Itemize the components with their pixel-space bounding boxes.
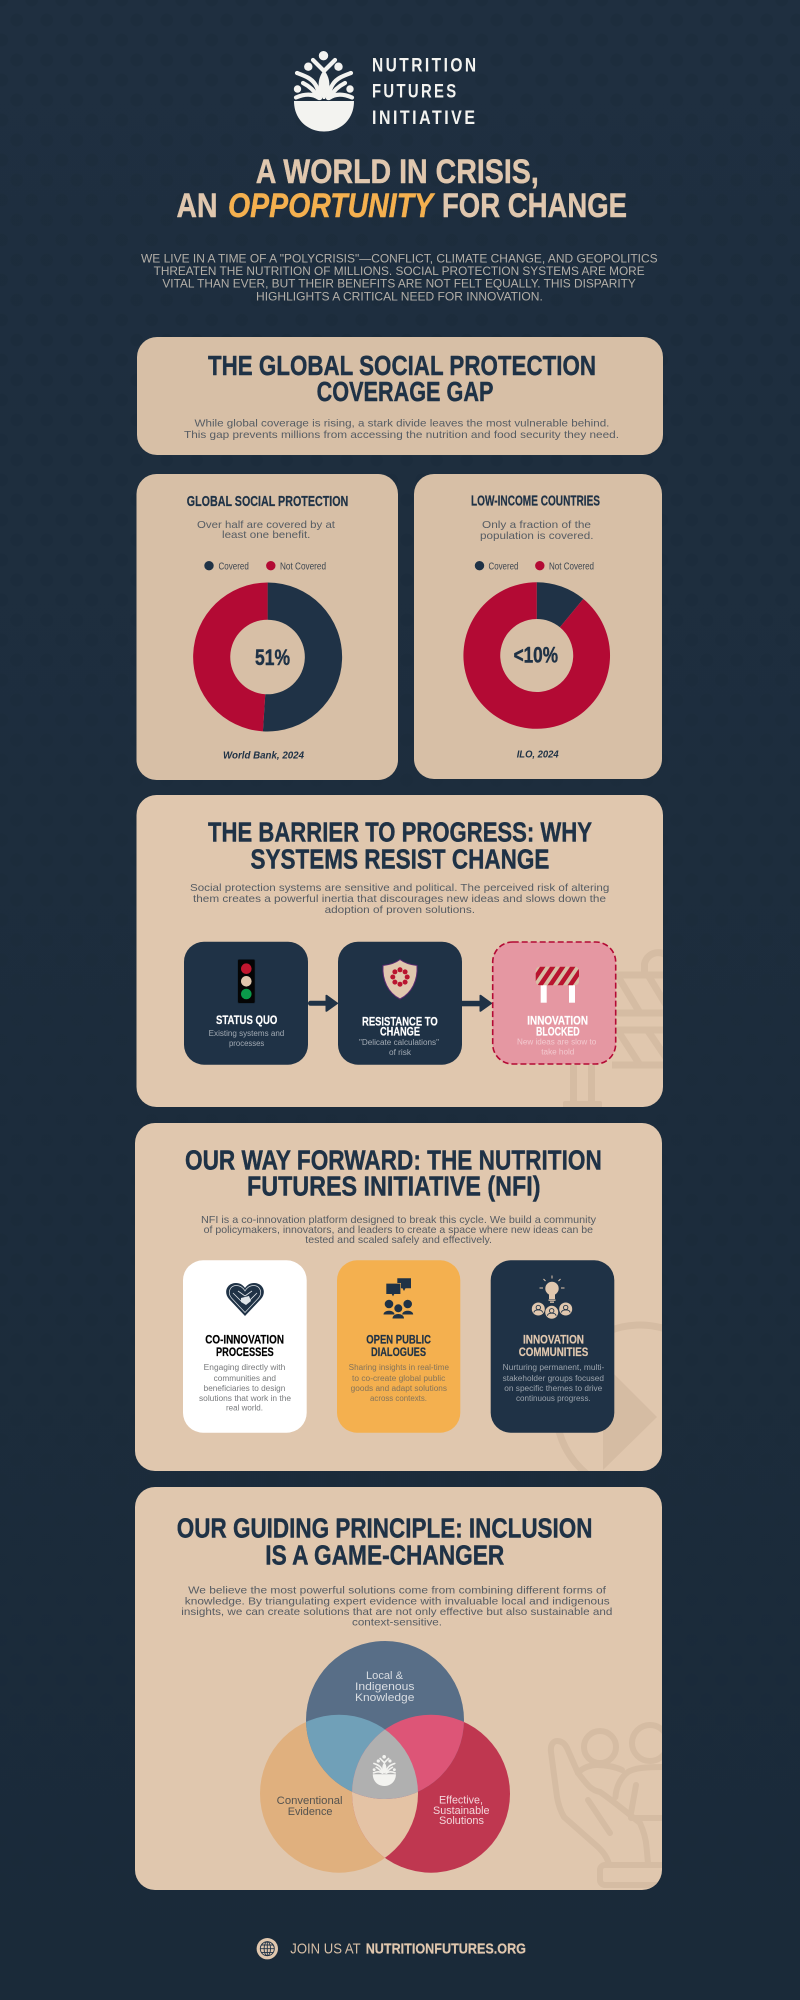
- step: innovation blocked: INNOVATION: [527, 1013, 588, 1027]
- text: guiding principle description: context-sensitive.: [352, 1617, 442, 1629]
- donut chart: 51 percent covered: [193, 582, 342, 732]
- heading: way forward: FUTURES INITIATIVE (NFI): [247, 1170, 540, 1201]
- step: innovation blocked: take hold: [541, 1048, 574, 1057]
- legend: Not Covered: [549, 561, 594, 572]
- legend: Not Covered: [280, 561, 326, 572]
- card: co-innovation processes: PROCESSES: [216, 1345, 274, 1359]
- intro paragraph: THREATEN THE NUTRITION OF MILLIONS. SOCIAL PROTECTION SYSTEMS ARE MORE: [154, 264, 645, 278]
- icon: handshake heart: [226, 1283, 264, 1316]
- venn label: local and indigenous knowledge: Local &: [366, 1670, 404, 1682]
- step: innovation blocked: [493, 942, 616, 1064]
- panel: our way forward: [135, 1123, 662, 1471]
- card: co-innovation processes: beneficiaries to design: [204, 1384, 285, 1393]
- heading: low-income countries: LOW-INCOME COUNTRIES: [471, 493, 600, 509]
- text: low-income description: [480, 519, 594, 542]
- text: global description: [197, 519, 335, 541]
- text: NFI description: tested and scaled safely and effectively.: [305, 1234, 492, 1246]
- text: barrier description: them creates a powerful inertia that discourages new ideas and slows down the: [193, 893, 606, 905]
- card: innovation communities: Nurturing permanent, multi-: [503, 1363, 605, 1372]
- icon: logo mark: [294, 51, 354, 132]
- legend: Covered: [488, 561, 518, 572]
- text: NFI description: NFI is a co-innovation platform designed to break this cycle. We build a community: [201, 1214, 597, 1226]
- panel: global social protection chart: [136, 474, 398, 780]
- step: resistance to change: RESISTANCE TO: [362, 1015, 438, 1029]
- text: coverage gap description: [184, 418, 619, 441]
- text: low-income description: population is covered.: [480, 530, 594, 542]
- heading: coverage gap: COVERAGE GAP: [317, 376, 493, 407]
- step: status quo: Existing systems and: [209, 1029, 284, 1038]
- step: resistance to change: [338, 942, 462, 1065]
- card: co-innovation processes: Engaging directly with: [204, 1363, 285, 1372]
- card: open public dialogues: OPEN PUBLIC: [366, 1333, 431, 1347]
- venn label: conventional evidence: Evidence: [288, 1806, 332, 1818]
- icon: watermark play circle: [556, 1322, 662, 1471]
- step: status quo: [184, 942, 308, 1065]
- icon: shield: [383, 960, 417, 999]
- title: FOR CHANGE: [442, 187, 627, 225]
- icon: road barrier: [536, 966, 579, 1003]
- legend: [475, 561, 594, 572]
- venn diagram: [260, 1641, 510, 1873]
- text: barrier description: Social protection systems are sensitive and political. The perceived risk of altering: [190, 882, 609, 894]
- heading: coverage gap: [208, 350, 596, 407]
- step: innovation blocked: New ideas are slow to: [517, 1038, 597, 1047]
- step: resistance to change: CHANGE: [380, 1025, 420, 1039]
- text: guiding principle description: insights, we can create solutions that are not only effective but also sustainable and: [181, 1606, 613, 1618]
- panel: coverage gap intro: [137, 337, 663, 455]
- heading: way forward: OUR WAY FORWARD: THE NUTRITION: [185, 1144, 602, 1175]
- card: open public dialogues: Sharing insights in real-time: [349, 1363, 450, 1372]
- icon: globe: [257, 1938, 278, 1959]
- logo wordmark: FUTURES: [372, 82, 458, 102]
- heading: way forward: [185, 1144, 602, 1201]
- header logo: [294, 51, 478, 132]
- intro paragraph: HIGHLIGHTS A CRITICAL NEED FOR INNOVATION.: [256, 290, 543, 304]
- card: co-innovation processes: real world.: [226, 1404, 263, 1413]
- panel: barrier to progress: [136, 795, 672, 1109]
- card: open public dialogues: to co-create global public: [352, 1374, 445, 1383]
- heading: barrier: THE BARRIER TO PROGRESS: WHY: [208, 817, 592, 848]
- heading: coverage gap: THE GLOBAL SOCIAL PROTECTION: [208, 350, 596, 381]
- text: barrier description: adoption of proven solutions.: [325, 904, 475, 916]
- text: guiding principle description: [181, 1585, 613, 1629]
- step: innovation blocked: BLOCKED: [536, 1025, 580, 1039]
- card: open public dialogues: [337, 1260, 460, 1433]
- arrow: resistance to blocked: [462, 995, 492, 1011]
- text: coverage gap description: While global coverage is rising, a stark divide leaves the most vulnerable behind.: [194, 418, 609, 430]
- logo wordmark: [372, 56, 478, 129]
- legend: [204, 561, 326, 572]
- card: co-innovation processes: communities and: [214, 1374, 276, 1383]
- icon: traffic light: [238, 959, 255, 1003]
- icon: lightbulb and community: [532, 1276, 572, 1319]
- step: status quo: processes: [229, 1039, 264, 1048]
- card: innovation communities: on specific themes to drive: [504, 1384, 603, 1393]
- text: NFI description: of policymakers, innovators, and leaders to create a space where new ideas can be: [204, 1224, 593, 1236]
- venn label: effective sustainable solutions: Effective,: [439, 1795, 483, 1807]
- text: global description: Over half are covered by at: [197, 519, 335, 531]
- text: low-income description: Only a fraction of the: [482, 519, 591, 531]
- title: AN: [176, 187, 218, 225]
- source: ILO: ILO, 2024: [517, 750, 559, 761]
- panel: guiding principle: [135, 1487, 670, 1890]
- icon: centre logo: [373, 1755, 396, 1786]
- donut chart: under 10 percent covered: [463, 582, 610, 729]
- card: co-innovation processes: CO-INNOVATION: [205, 1333, 284, 1347]
- venn label: conventional evidence: [277, 1795, 342, 1818]
- heading: guiding principle: [177, 1513, 593, 1570]
- title: A WORLD IN CRISIS,: [256, 153, 539, 191]
- text: barrier description: [190, 882, 609, 916]
- heading: barrier: SYSTEMS RESIST CHANGE: [250, 843, 549, 874]
- card: innovation communities: continuous progress.: [516, 1394, 591, 1403]
- card: co-innovation processes: solutions that work in the: [199, 1394, 292, 1403]
- donut chart: 51 percent covered: 51%: [255, 645, 290, 670]
- card: innovation communities: INNOVATION: [523, 1333, 584, 1347]
- card: open public dialogues: goods and adapt solutions: [351, 1384, 447, 1393]
- venn label: local and indigenous knowledge: [355, 1670, 415, 1704]
- venn label: effective sustainable solutions: Sustainable: [433, 1805, 490, 1817]
- card: innovation communities: stakeholder groups focused: [503, 1374, 604, 1383]
- text: guiding principle description: knowledge. By triangulating expert evidence with invaluable local and indigenous: [185, 1595, 610, 1607]
- text: coverage gap description: This gap prevents millions from accessing the nutrition and food security they need.: [184, 429, 619, 441]
- step: resistance to change: of risk: [389, 1048, 412, 1057]
- intro paragraph: [141, 252, 658, 304]
- legend: Covered: [218, 561, 249, 572]
- source: World Bank: World Bank, 2024: [223, 751, 304, 762]
- card: open public dialogues: across contexts.: [370, 1394, 427, 1403]
- title: [176, 153, 627, 225]
- intro paragraph: VITAL THAN EVER, BUT THEIR BENEFITS ARE NOT FELT EQUALLY. THIS DISPARITY: [162, 277, 636, 291]
- step: resistance to change: "Delicate calculations": [359, 1038, 439, 1047]
- logo wordmark: NUTRITION: [372, 56, 478, 77]
- text: global description: least one benefit.: [222, 529, 310, 541]
- panel: low-income countries chart: [414, 474, 662, 779]
- venn label: conventional evidence: Conventional: [277, 1795, 342, 1807]
- logo wordmark: INITIATIVE: [372, 108, 478, 129]
- step: status quo: STATUS QUO: [216, 1013, 277, 1027]
- card: innovation communities: [491, 1260, 614, 1433]
- card: co-innovation processes: [183, 1260, 307, 1433]
- heading: guiding principle: IS A GAME-CHANGER: [265, 1539, 504, 1570]
- icon: watermark barrier: [563, 953, 672, 1109]
- venn label: effective sustainable solutions: [433, 1795, 490, 1827]
- footer call to action: JOIN US AT: [290, 1941, 361, 1957]
- footer call to action: [257, 1938, 526, 1959]
- heading: guiding principle: OUR GUIDING PRINCIPLE: INCLUSION: [177, 1513, 593, 1544]
- donut chart: under 10 percent covered: <10%: [514, 643, 558, 668]
- footer call to action: NUTRITIONFUTURES.ORG: [366, 1941, 526, 1957]
- card: open public dialogues: DIALOGUES: [371, 1345, 426, 1359]
- heading: barrier: [208, 817, 592, 874]
- icon: people in dialogue: [384, 1278, 413, 1318]
- text: guiding principle description: We believe the most powerful solutions come from combining different forms of: [188, 1585, 606, 1597]
- venn label: local and indigenous knowledge: Indigenous: [355, 1681, 415, 1693]
- intro paragraph: WE LIVE IN A TIME OF A "POLYCRISIS"—CONFLICT, CLIMATE CHANGE, AND GEOPOLITICS: [141, 252, 658, 266]
- title: OPPORTUNITY: [228, 187, 436, 225]
- text: NFI description: [201, 1214, 597, 1246]
- card: innovation communities: COMMUNITIES: [519, 1345, 588, 1359]
- icon: watermark hand holding people: [551, 1725, 670, 1885]
- venn label: effective sustainable solutions: Solutions: [439, 1815, 484, 1827]
- heading: global social protection: GLOBAL SOCIAL PROTECTION: [187, 494, 348, 510]
- arrow: status quo to resistance: [308, 995, 338, 1011]
- venn label: local and indigenous knowledge: Knowledge: [355, 1692, 414, 1704]
